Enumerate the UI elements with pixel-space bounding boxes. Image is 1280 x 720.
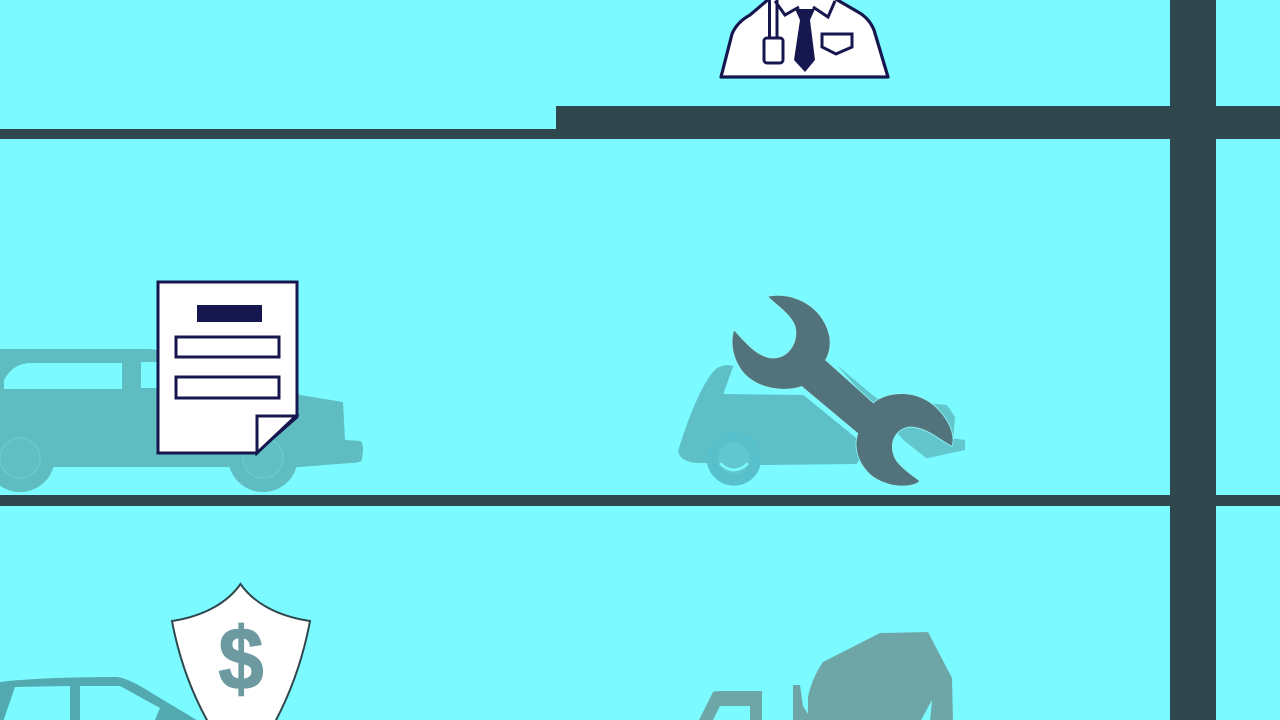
icon: insurance shield with dollar [172,584,310,720]
icon: faded car behind document [0,349,363,492]
icon: person in shirt and tie [721,0,888,77]
dollar sign: $ [218,609,264,708]
icon: wrench [732,296,953,486]
icon: document [158,282,297,453]
icon: faded cement mixer truck [698,632,953,720]
icon: faded car behind wrench [678,365,965,486]
icon: faded car below shield [0,677,200,720]
